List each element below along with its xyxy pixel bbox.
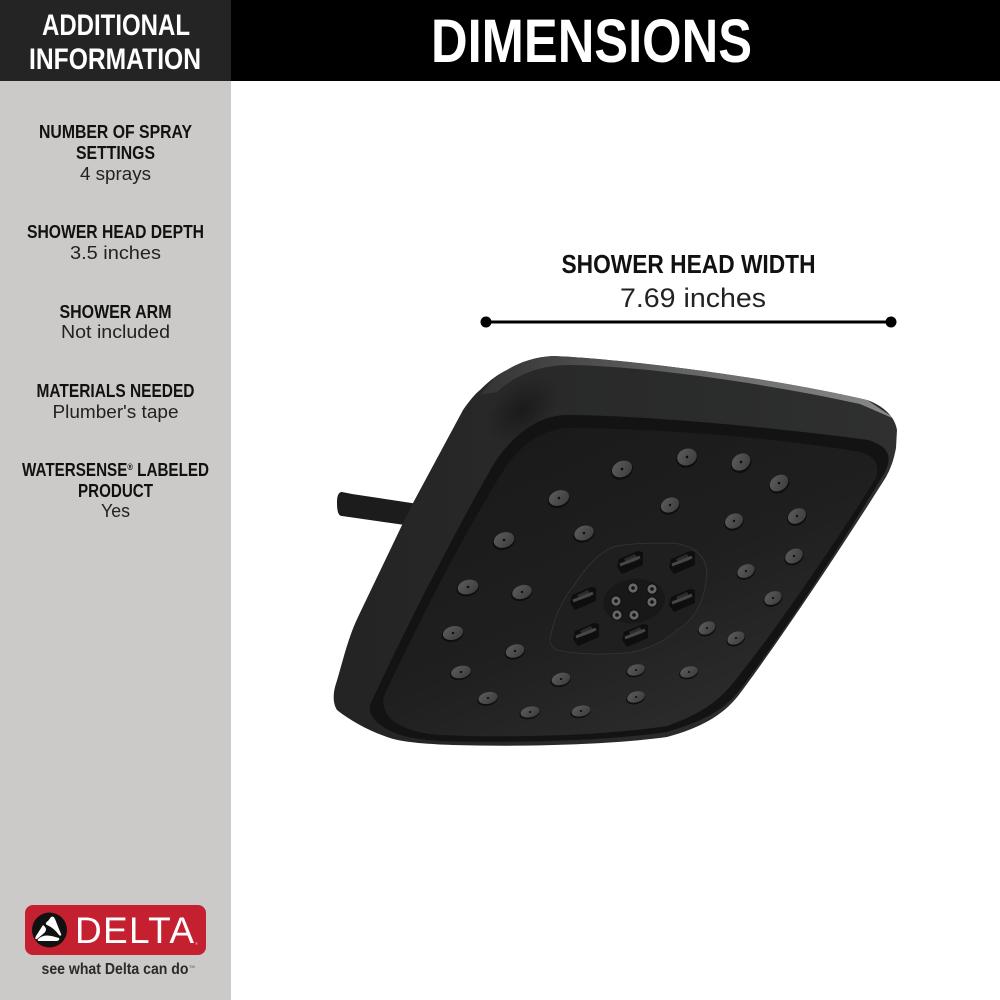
width dimension arrow	[480, 316, 896, 328]
spec: shower arm: Not included	[61, 322, 170, 342]
logo tagline: TM	[189, 964, 195, 969]
width label	[562, 249, 816, 313]
header bar: additional information	[0, 0, 231, 81]
outer spray nozzles	[440, 446, 810, 721]
spec: watersense labeled product: Yes	[101, 501, 130, 521]
width label: SHOWER HEAD WIDTH	[562, 249, 816, 279]
spec: materials needed: Plumber's tape	[52, 402, 178, 422]
spec: watersense labeled product: WATERSENSE	[22, 460, 147, 480]
spec: watersense labeled product: ®	[127, 462, 133, 472]
spec: watersense labeled product	[22, 460, 209, 521]
center rosette	[600, 575, 668, 627]
spec: watersense labeled product: LABELED	[133, 460, 209, 480]
sidebar panel	[0, 0, 231, 1000]
logo tagline: see what Delta can do	[42, 961, 189, 978]
shower arm stub	[337, 492, 418, 525]
header bar: additional information: INFORMATION	[29, 43, 201, 76]
spec: shower head depth: 3.5 inches	[70, 243, 161, 263]
header bar: additional information: ADDITIONAL	[42, 9, 190, 42]
title: dimensions: DIMENSIONS	[431, 7, 752, 75]
spec: shower arm	[60, 302, 172, 342]
spec: shower head depth: SHOWER HEAD DEPTH	[27, 222, 204, 242]
spec: number of spray settings: NUMBER OF SPRAY	[39, 122, 192, 142]
central spray panel	[550, 543, 707, 654]
title: dimensions	[231, 0, 1000, 81]
shower head body	[320, 345, 910, 755]
recessed rim	[370, 415, 889, 742]
spec: materials needed	[36, 381, 194, 422]
logo: Delta: ®	[195, 941, 198, 946]
spec: number of spray settings: SETTINGS	[76, 143, 155, 163]
wedge nozzles	[570, 551, 695, 647]
spec: shower arm: SHOWER ARM	[60, 302, 172, 322]
logo: Delta	[25, 905, 206, 955]
spec: watersense labeled product: PRODUCT	[78, 481, 153, 501]
spec: shower head depth	[27, 222, 204, 263]
shower head product illustration	[320, 345, 910, 755]
spec: number of spray settings	[39, 122, 192, 184]
spray face	[383, 428, 877, 736]
spec: number of spray settings: 4 sprays	[80, 164, 151, 184]
logo: Delta: DELTA	[75, 910, 194, 951]
spec: materials needed: MATERIALS NEEDED	[36, 381, 194, 401]
width label: 7.69 inches	[620, 283, 766, 313]
